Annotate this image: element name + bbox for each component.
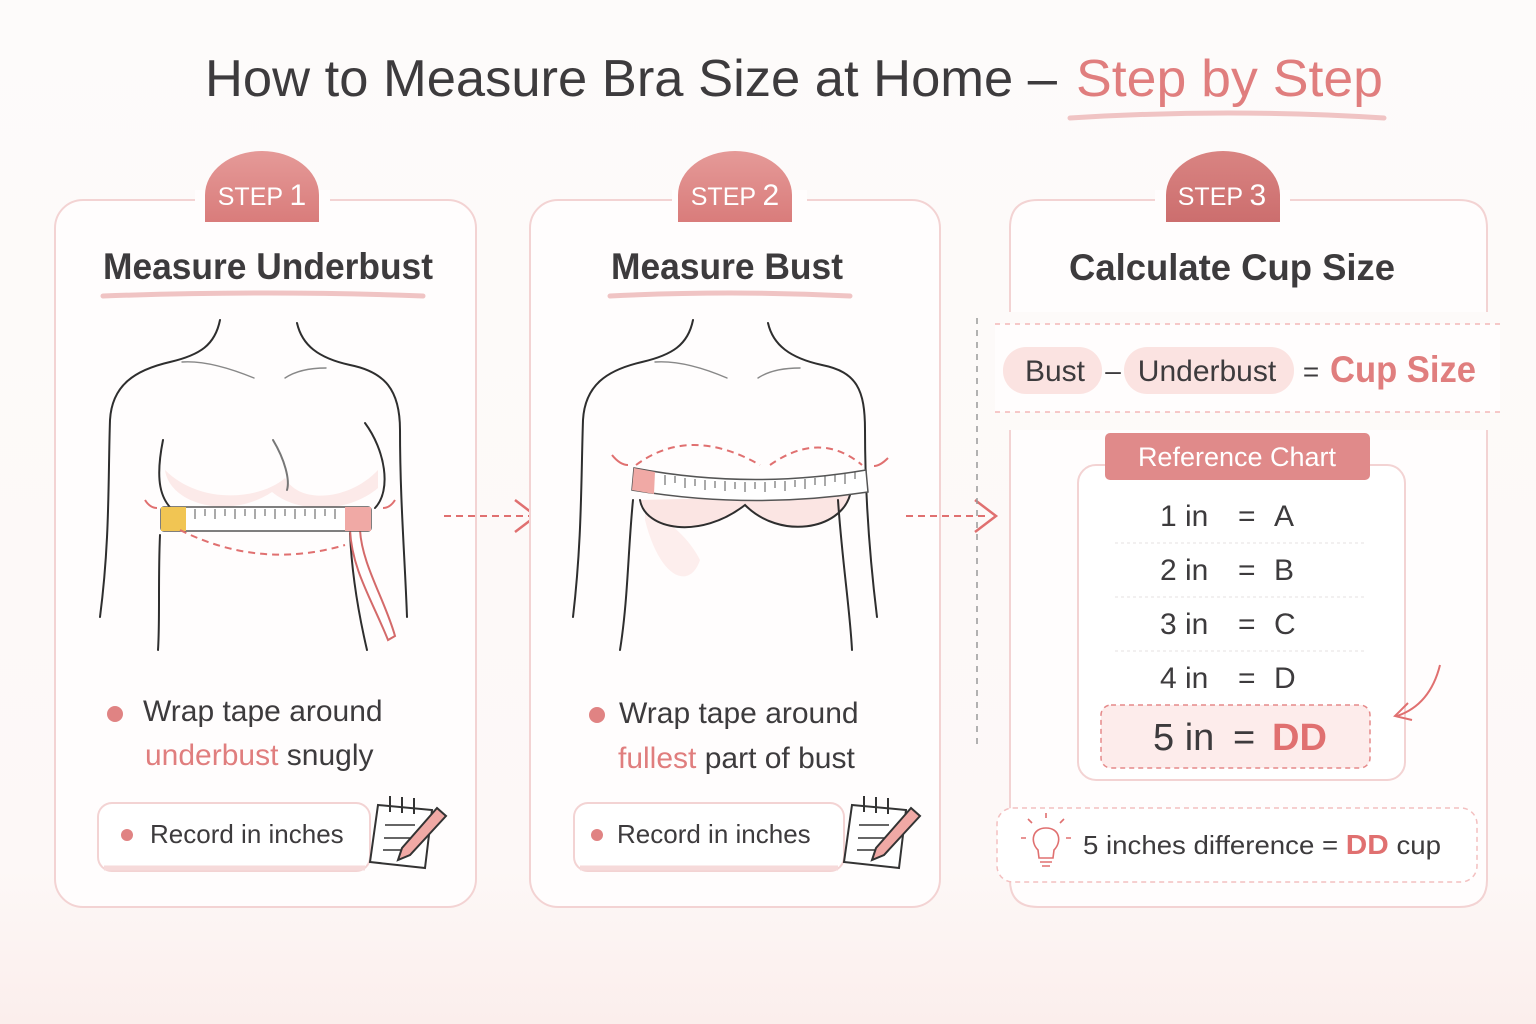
record box 2 [574,803,844,871]
formula: Underbust [1138,355,1277,388]
badge: step 2 [678,151,792,222]
reference chart: = [1238,662,1256,695]
panel: step 2 [530,151,940,907]
reference chart [1078,433,1405,780]
panel: step 1 [55,151,476,907]
bullet: wrap underbust [107,695,383,772]
reference chart: Reference Chart [1138,442,1337,472]
highlighted row DD: = [1233,717,1255,759]
reference chart: = [1238,554,1256,587]
reference chart: 2 in [1160,554,1208,587]
formula: Cup Size [1330,349,1476,390]
bullet: wrap bust: Wrap tape around [619,697,859,730]
bullet: wrap underbust: underbust snugly [145,739,374,772]
heading: measure underbust: Measure Underbust [103,246,433,287]
reference chart: B [1274,554,1294,587]
bullet: wrap bust [589,697,859,775]
icon: notepad pencil 2 [844,796,920,868]
reference chart: 3 in [1160,608,1208,641]
badge: step 3 [1166,151,1280,222]
badge: step 2: STEP 2 [691,179,779,212]
arrow: step2 to step3 [906,500,996,532]
highlighted row DD: DD [1272,717,1327,759]
arrow: to DD [1395,665,1440,720]
reference chart: 1 in [1160,500,1208,533]
bullet: wrap underbust: Wrap tape around [143,695,383,728]
arrow: step1 to step2 [444,500,536,532]
record box 1 [98,803,370,871]
tip box: 5 inches difference = DD cup [1083,829,1441,860]
heading: calculate cup size: Calculate Cup Size [1069,247,1395,288]
reference chart: = [1238,500,1256,533]
highlighted row DD [1101,705,1370,768]
title: How to Measure Bra Size at Home – [205,50,1057,108]
title [205,50,1384,118]
illustration: bust measurement [573,320,877,650]
formula: – [1105,355,1121,386]
panel: step 3 [977,151,1500,907]
divider vertical dashed [976,318,978,745]
badge: step 3: STEP 3 [1178,179,1266,212]
formula: Bust [1025,355,1086,388]
formula: = [1303,356,1319,387]
record box 1: Record in inches [150,819,344,849]
reference chart: D [1274,662,1296,695]
record box 2: Record in inches [617,819,811,849]
tip box [997,808,1477,882]
reference chart: 4 in [1160,662,1208,695]
heading: measure bust: Measure Bust [611,246,843,287]
bullet: wrap bust: fullest part of bust [618,742,855,775]
formula [995,324,1500,412]
reference chart: C [1274,608,1296,641]
reference chart: A [1274,500,1294,533]
badge: step 1 [205,151,319,222]
badge: step 1: STEP 1 [218,179,306,212]
highlighted row DD: 5 in [1153,717,1214,759]
title: Step by Step [1076,50,1383,108]
reference chart: = [1238,608,1256,641]
illustration: underbust measurement [100,320,407,650]
icon: lightbulb [1021,813,1071,866]
icon: notepad pencil 1 [370,796,446,868]
